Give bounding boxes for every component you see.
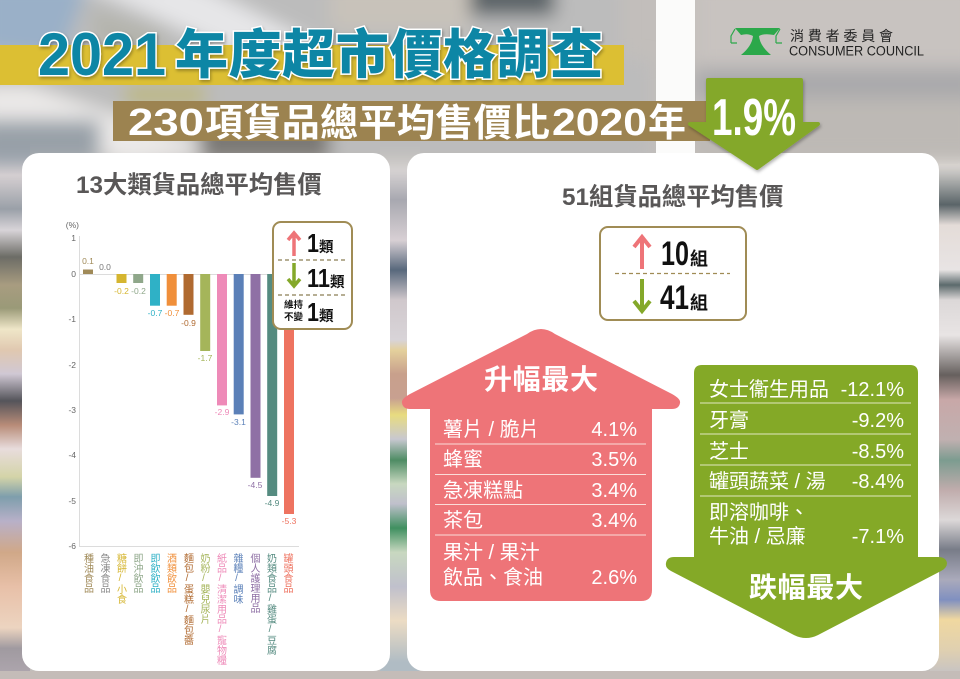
- axis labels: 0: [71, 269, 76, 279]
- subtitle: 項貨品總平均售價比: [205, 103, 550, 145]
- icon: down arrow: [288, 263, 300, 286]
- icon: scales: [731, 28, 782, 55]
- legend: 13 categories: 類: [319, 308, 334, 325]
- category labels: 種油食品: [82, 552, 94, 594]
- subtitle: 2020: [552, 102, 647, 144]
- value labels: -0.7: [148, 308, 163, 318]
- legend: 13 categories: 維持: [284, 299, 304, 311]
- table rows: -7.1%: [852, 526, 904, 548]
- table rows: -12.1%: [841, 379, 904, 401]
- table rows: 2.6%: [591, 567, 637, 589]
- category labels: 雜糧/調味: [231, 552, 243, 604]
- value labels: 0.1: [82, 256, 94, 266]
- legend: 13 categories: 11: [307, 263, 330, 293]
- table rows: 女士衞生用品: [709, 378, 829, 401]
- axis labels: -6: [68, 541, 76, 551]
- icon: down arrow: [634, 279, 650, 311]
- category labels: 紙品/清潔用品/寵物糧: [214, 552, 226, 666]
- panel: right card: [407, 153, 939, 671]
- table rows: 牛油 / 忌廉: [709, 525, 806, 548]
- arrow: overall down 1.9%: 1.9%: [712, 89, 796, 147]
- legend: 51 groups: 41: [660, 279, 689, 317]
- value labels: -4.9: [265, 498, 280, 508]
- axis labels: -2: [68, 360, 76, 370]
- table rows: 蜂蜜: [443, 448, 483, 471]
- axis labels: (%): [66, 220, 79, 230]
- table rows: [709, 378, 904, 548]
- category labels: 酒類飲品: [164, 553, 176, 594]
- table rows: 急凍糕點: [443, 479, 523, 502]
- legend: 13 categories: [273, 222, 352, 329]
- legend: 13 categories: 不變: [284, 311, 304, 323]
- chart axes: [80, 236, 299, 546]
- table rows: 3.5%: [591, 449, 637, 471]
- legend: 51 groups: 10: [661, 235, 689, 273]
- category labels: [82, 552, 293, 666]
- axis labels: -1: [68, 314, 76, 324]
- table rows: 茶包: [443, 509, 483, 532]
- bars: [83, 270, 294, 514]
- table rows: -8.4%: [852, 471, 904, 493]
- value labels: -0.7: [165, 308, 180, 318]
- value labels: -0.2: [131, 286, 146, 296]
- axis labels: [66, 220, 79, 551]
- table rows: 3.4%: [591, 510, 637, 532]
- value labels: -2.9: [215, 407, 230, 417]
- table rows: [443, 418, 637, 589]
- table rows: 4.1%: [591, 419, 637, 441]
- table rows: 果汁 / 果汁: [443, 541, 540, 564]
- legend: 13 categories: 類: [319, 239, 334, 256]
- logo: Consumer Council: CONSUMER COUNCIL: [789, 44, 924, 58]
- category labels: 奶類食品/雞蛋/豆腐: [264, 553, 276, 656]
- table rows: 罐頭蔬菜 / 湯: [709, 470, 826, 493]
- panel: largest decreases arrow: [666, 365, 947, 638]
- axis labels: -5: [68, 496, 76, 506]
- axis labels: -3: [68, 405, 76, 415]
- value labels: -5.3: [282, 516, 297, 526]
- category labels: 個人護理用品: [248, 552, 260, 614]
- panel: left card: [22, 153, 390, 671]
- legend: 51 groups: 組: [690, 248, 708, 269]
- table rows: 薯片 / 脆片: [443, 418, 540, 441]
- table rows: -9.2%: [852, 410, 904, 432]
- title: 年度超市價格調查: [175, 26, 603, 85]
- value labels: -0.2: [114, 286, 129, 296]
- subtitle: [128, 102, 686, 145]
- bar chart: [66, 220, 299, 666]
- table rows: -8.5%: [852, 441, 904, 463]
- title band: [0, 45, 624, 85]
- heading: largest decrease: 跌幅最大: [749, 572, 863, 603]
- value labels: [82, 256, 297, 526]
- value labels: -3.1: [231, 417, 246, 427]
- subtitle band: [113, 101, 710, 141]
- title: [38, 21, 603, 88]
- heading: right panel: 51組貨品總平均售價: [562, 184, 783, 211]
- arrow: overall down 1.9%: [690, 80, 818, 168]
- icon: up arrow: [288, 233, 300, 256]
- title: 2021: [38, 21, 166, 88]
- value labels: -4.5: [248, 480, 263, 490]
- panel: largest increases house: [402, 329, 680, 601]
- legend: 13 categories: 類: [330, 274, 345, 291]
- table rows: 即溶咖啡、: [709, 501, 809, 524]
- logo: Consumer Council: 消費者委員會: [790, 28, 893, 44]
- category labels: 即飲飲品: [148, 553, 160, 594]
- subtitle: 年: [648, 103, 686, 145]
- legend: 13 categories: 1: [307, 297, 319, 327]
- category labels: 麵包/蛋糕/麵包醬: [182, 553, 194, 646]
- category labels: 罐頭食品: [281, 552, 293, 594]
- legend: 13 categories: 1: [307, 228, 319, 258]
- value labels: -0.9: [181, 318, 196, 328]
- axis labels: 1: [71, 233, 76, 243]
- value labels: 0.0: [99, 262, 111, 272]
- category labels: 急凍食品: [98, 552, 110, 594]
- table rows: 飲品、食油: [443, 566, 543, 589]
- category labels: 奶粉/嬰兒尿片: [198, 553, 210, 625]
- table rows: 3.4%: [591, 480, 637, 502]
- category labels: 即沖飲品: [131, 553, 143, 594]
- legend: 51 groups: 組: [690, 292, 708, 313]
- axis labels: -4: [68, 450, 76, 460]
- legend: 51 groups: [600, 227, 746, 320]
- logo: Consumer Council: [731, 28, 924, 58]
- table rows: 牙膏: [709, 409, 749, 432]
- value labels: -1.7: [198, 353, 213, 363]
- subtitle: 230: [128, 102, 204, 144]
- table rows: 芝士: [709, 440, 749, 463]
- heading: largest increase: 升幅最大: [484, 364, 598, 395]
- heading: left chart: 13大類貨品總平均售價: [76, 172, 322, 199]
- category labels: 糖餅/小食: [114, 552, 126, 605]
- icon: up arrow: [634, 237, 650, 269]
